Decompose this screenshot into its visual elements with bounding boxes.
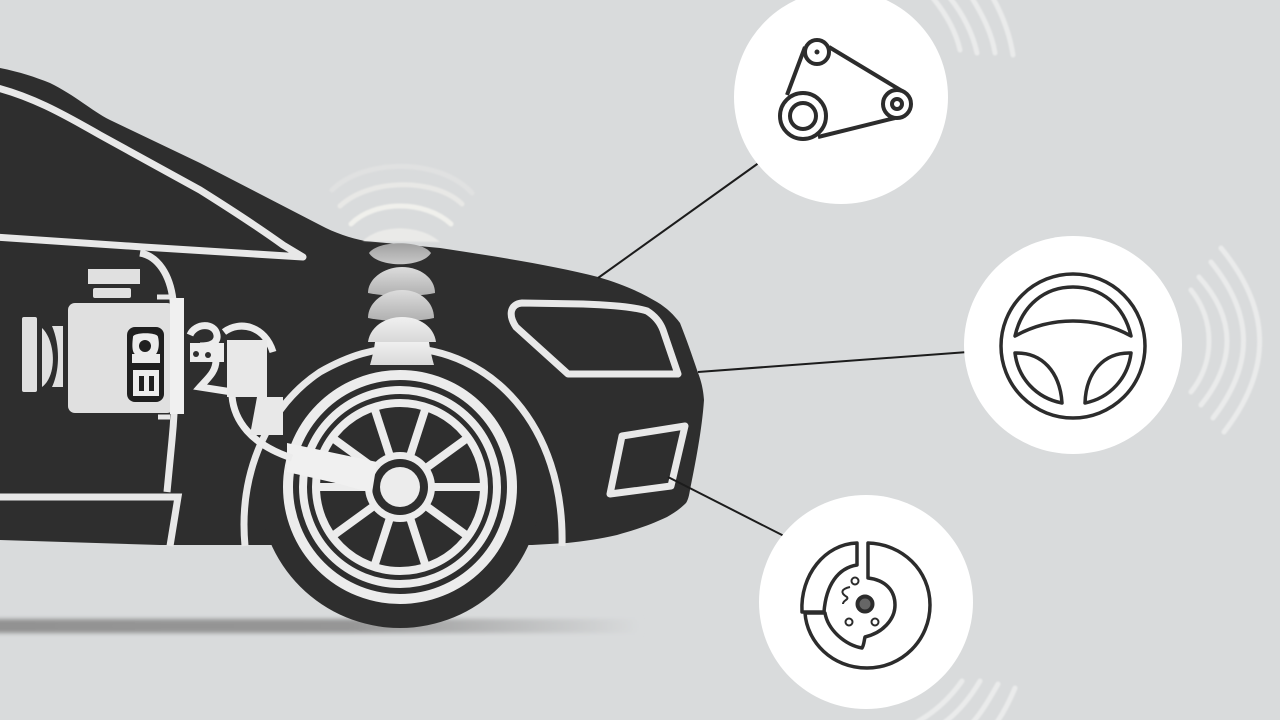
ground shadow [0, 619, 640, 633]
spokes [315, 406, 485, 568]
callout: drive belt [734, 0, 948, 204]
car [0, 68, 704, 628]
leader lines [598, 162, 968, 536]
callout: brake disc [759, 495, 973, 709]
actuator boxes [227, 340, 283, 435]
vibration waves: steering [1191, 248, 1260, 432]
side window outline [0, 87, 303, 257]
callout: steering wheel [964, 236, 1182, 454]
wheel arch [244, 348, 562, 546]
icon: brake disc and caliper [802, 543, 930, 668]
headlight [511, 303, 678, 374]
wheel [288, 375, 512, 599]
strut domes [368, 243, 436, 365]
vibration beam into wheel [287, 443, 377, 493]
car body silhouette [0, 68, 704, 545]
vibration waves: belt [933, 0, 1013, 55]
connector squiggle [190, 326, 292, 458]
icon: belt and pulleys [780, 40, 911, 139]
tyre [259, 346, 541, 628]
door line and sill [0, 253, 178, 546]
fog lamp [610, 426, 685, 494]
vibration waves: brake [917, 681, 1015, 720]
icon: steering wheel [1001, 274, 1145, 418]
hood vibration waves [332, 166, 472, 242]
engine control slot [127, 327, 164, 402]
engine [22, 269, 184, 414]
hub [365, 452, 435, 522]
